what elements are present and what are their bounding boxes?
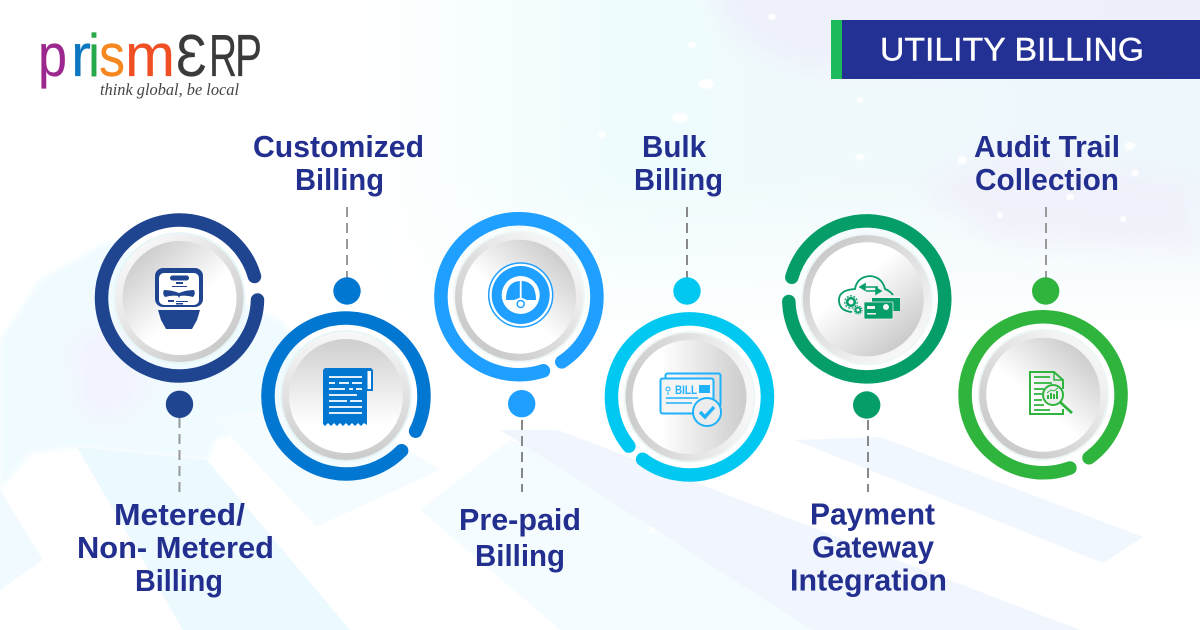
label: Customized — [253, 130, 424, 164]
step 4: Bulk Billing — [611, 130, 767, 475]
label: Billing — [634, 163, 723, 197]
label — [974, 130, 1120, 197]
disc — [280, 330, 412, 462]
connector dot — [166, 391, 193, 418]
label: Integration — [790, 564, 947, 598]
label: Billing — [135, 564, 223, 598]
logo wordmark: p — [38, 22, 67, 89]
connector dot — [508, 390, 535, 417]
ring — [965, 317, 1121, 473]
disc — [801, 233, 933, 365]
connector line — [521, 420, 523, 492]
ring — [268, 318, 424, 474]
logo wordmark: R — [209, 23, 237, 89]
logo wordmark: r — [71, 22, 91, 89]
title: UTILITY BILLING — [880, 32, 1144, 68]
label — [253, 130, 424, 197]
logo: prismERP — [38, 22, 262, 99]
connector line — [346, 207, 348, 278]
icon: gauge — [489, 263, 553, 327]
icon: bill with check: BILL — [675, 385, 697, 397]
logo wordmark: s — [99, 22, 125, 89]
connector line — [686, 207, 688, 278]
label: Metered/ — [114, 498, 246, 532]
label: Gateway — [812, 530, 934, 564]
label: Billing — [475, 539, 565, 573]
connector dot — [333, 277, 361, 305]
label: Non- Metered — [77, 531, 274, 565]
connector line — [178, 418, 180, 493]
connector dot — [853, 391, 880, 419]
ring — [611, 319, 767, 475]
ring — [441, 219, 597, 375]
connector line — [1045, 207, 1047, 278]
icon: bill with check — [660, 374, 721, 426]
label: Billing — [295, 163, 384, 197]
label: Collection — [975, 163, 1119, 197]
label: Payment — [810, 498, 935, 532]
icon: audit report — [1030, 372, 1072, 414]
label: Audit Trail — [974, 130, 1120, 164]
icon: electric meter — [155, 268, 203, 329]
disc — [977, 329, 1109, 461]
connector dot — [1032, 277, 1059, 305]
label: Bulk — [642, 130, 706, 164]
step 1: Metered / Non-Metered Billing — [77, 220, 274, 598]
connector line — [867, 420, 869, 492]
disc — [114, 232, 246, 364]
label: Pre-paid — [459, 503, 581, 537]
step 5: Payment Gateway Integration — [789, 221, 947, 598]
ring — [102, 220, 257, 376]
disc — [624, 331, 756, 463]
logo wordmark: Ɛ — [176, 23, 207, 89]
label — [459, 503, 581, 573]
title banner — [831, 20, 1200, 79]
step 6: Audit Trail Collection — [965, 130, 1121, 473]
logo wordmark: i — [88, 22, 100, 89]
label — [77, 498, 274, 598]
ring — [789, 221, 945, 377]
logo wordmark — [38, 22, 262, 89]
label — [634, 130, 723, 197]
icon: cloud payment — [839, 276, 900, 319]
logo wordmark: P — [235, 23, 262, 89]
step 3: Pre-paid Billing — [441, 219, 597, 573]
disc — [453, 231, 585, 363]
label — [790, 498, 947, 598]
step 2: Customized Billing — [253, 130, 424, 474]
logo tagline: think global, be local — [100, 80, 239, 99]
connector dot — [673, 277, 701, 305]
logo wordmark: m — [125, 22, 175, 89]
icon: receipt — [323, 368, 373, 426]
